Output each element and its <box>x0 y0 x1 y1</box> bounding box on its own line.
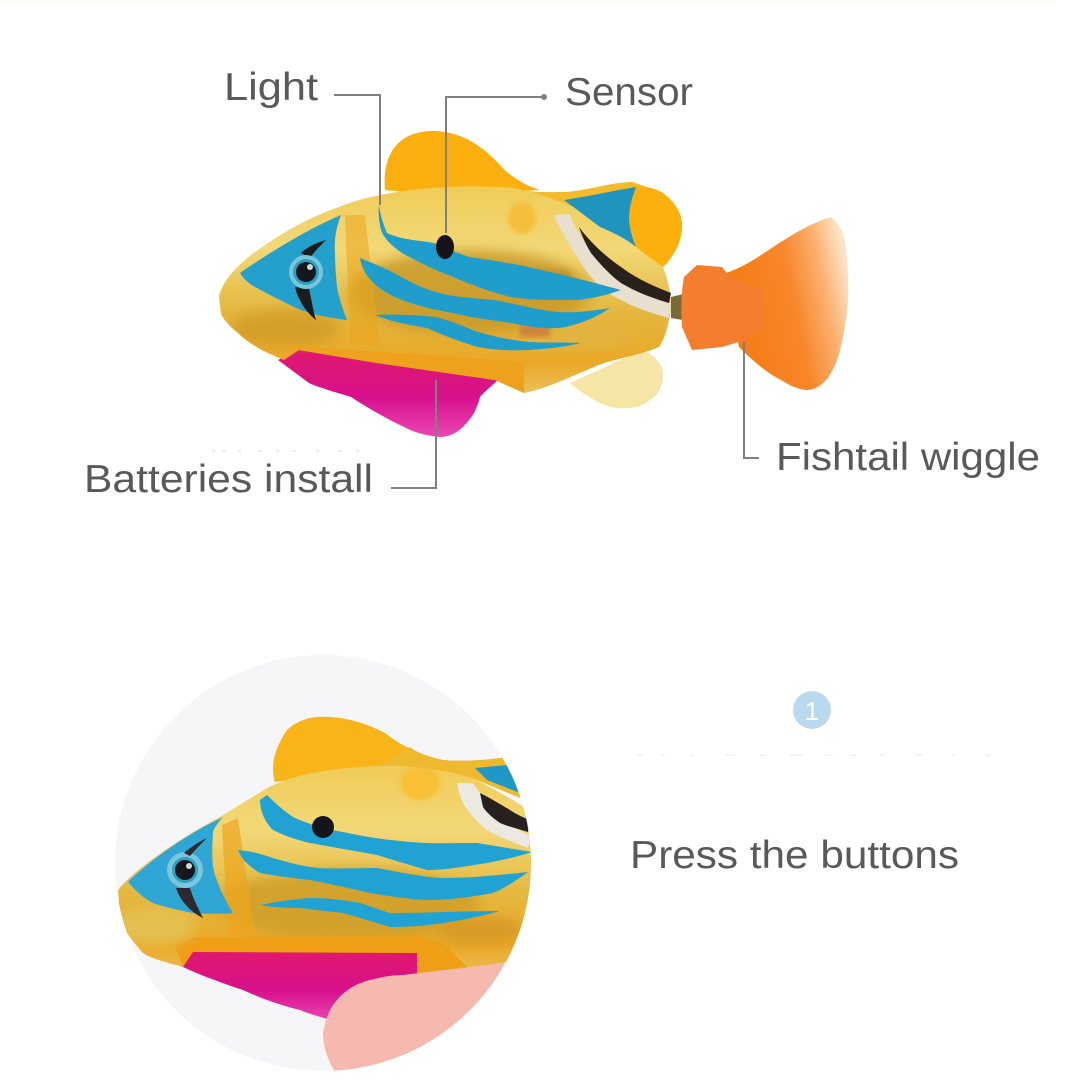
label: batteries install: Batteries install <box>84 458 373 501</box>
faint marks above batteries label <box>212 450 359 452</box>
main fish illustration <box>219 131 848 437</box>
white stripe <box>554 214 671 318</box>
faint strip at top edge <box>0 0 1055 3</box>
fishtail fan <box>726 217 848 390</box>
black stripe <box>579 227 671 303</box>
eye close-up <box>167 852 203 888</box>
sensor dot <box>436 235 454 259</box>
callout line: sensor <box>446 95 546 233</box>
internal shading close-up <box>115 766 525 978</box>
label: light: Light <box>224 66 318 109</box>
step label: Press the buttons <box>630 834 959 877</box>
head black marks <box>295 240 326 320</box>
sensor dot close-up <box>312 816 334 838</box>
head blue close-up <box>128 817 233 914</box>
close-up circle background <box>115 655 531 1071</box>
fish body close-up <box>118 766 535 977</box>
orange hub <box>681 265 764 350</box>
fish body <box>219 186 671 393</box>
step number badge: 1 <box>805 696 819 726</box>
dorsal fin close-up <box>273 717 520 782</box>
step number badge <box>793 691 831 729</box>
rear fin ridge <box>513 182 682 267</box>
belly fin <box>278 350 503 437</box>
fishtail connector <box>671 292 695 322</box>
callout line: fishtail wiggle <box>744 342 759 458</box>
lower rear fin <box>570 350 663 408</box>
label: fishtail wiggle: Fishtail wiggle <box>776 436 1040 479</box>
blue body stripes <box>360 205 621 350</box>
belly pink close-up <box>183 952 417 1022</box>
internal circuit shading <box>230 202 630 393</box>
dorsal fin <box>385 131 540 196</box>
rear fin orange lobe <box>629 186 682 267</box>
head blue marking <box>240 215 347 320</box>
white stripe close-up <box>457 783 532 848</box>
callout line: batteries install <box>391 380 436 488</box>
close-up fish <box>115 717 540 1075</box>
faint dashes under badge <box>636 754 990 756</box>
callout line: light <box>334 95 380 205</box>
ridge close-up <box>380 747 525 800</box>
eye <box>289 255 323 289</box>
stripes close-up <box>238 795 532 927</box>
black stripe close-up <box>480 793 530 832</box>
label: sensor: Sensor <box>565 71 693 114</box>
rear fin blue <box>564 187 636 247</box>
rear blue close-up <box>475 765 520 793</box>
finger <box>323 962 506 1071</box>
head dark marks close-up <box>176 838 207 918</box>
